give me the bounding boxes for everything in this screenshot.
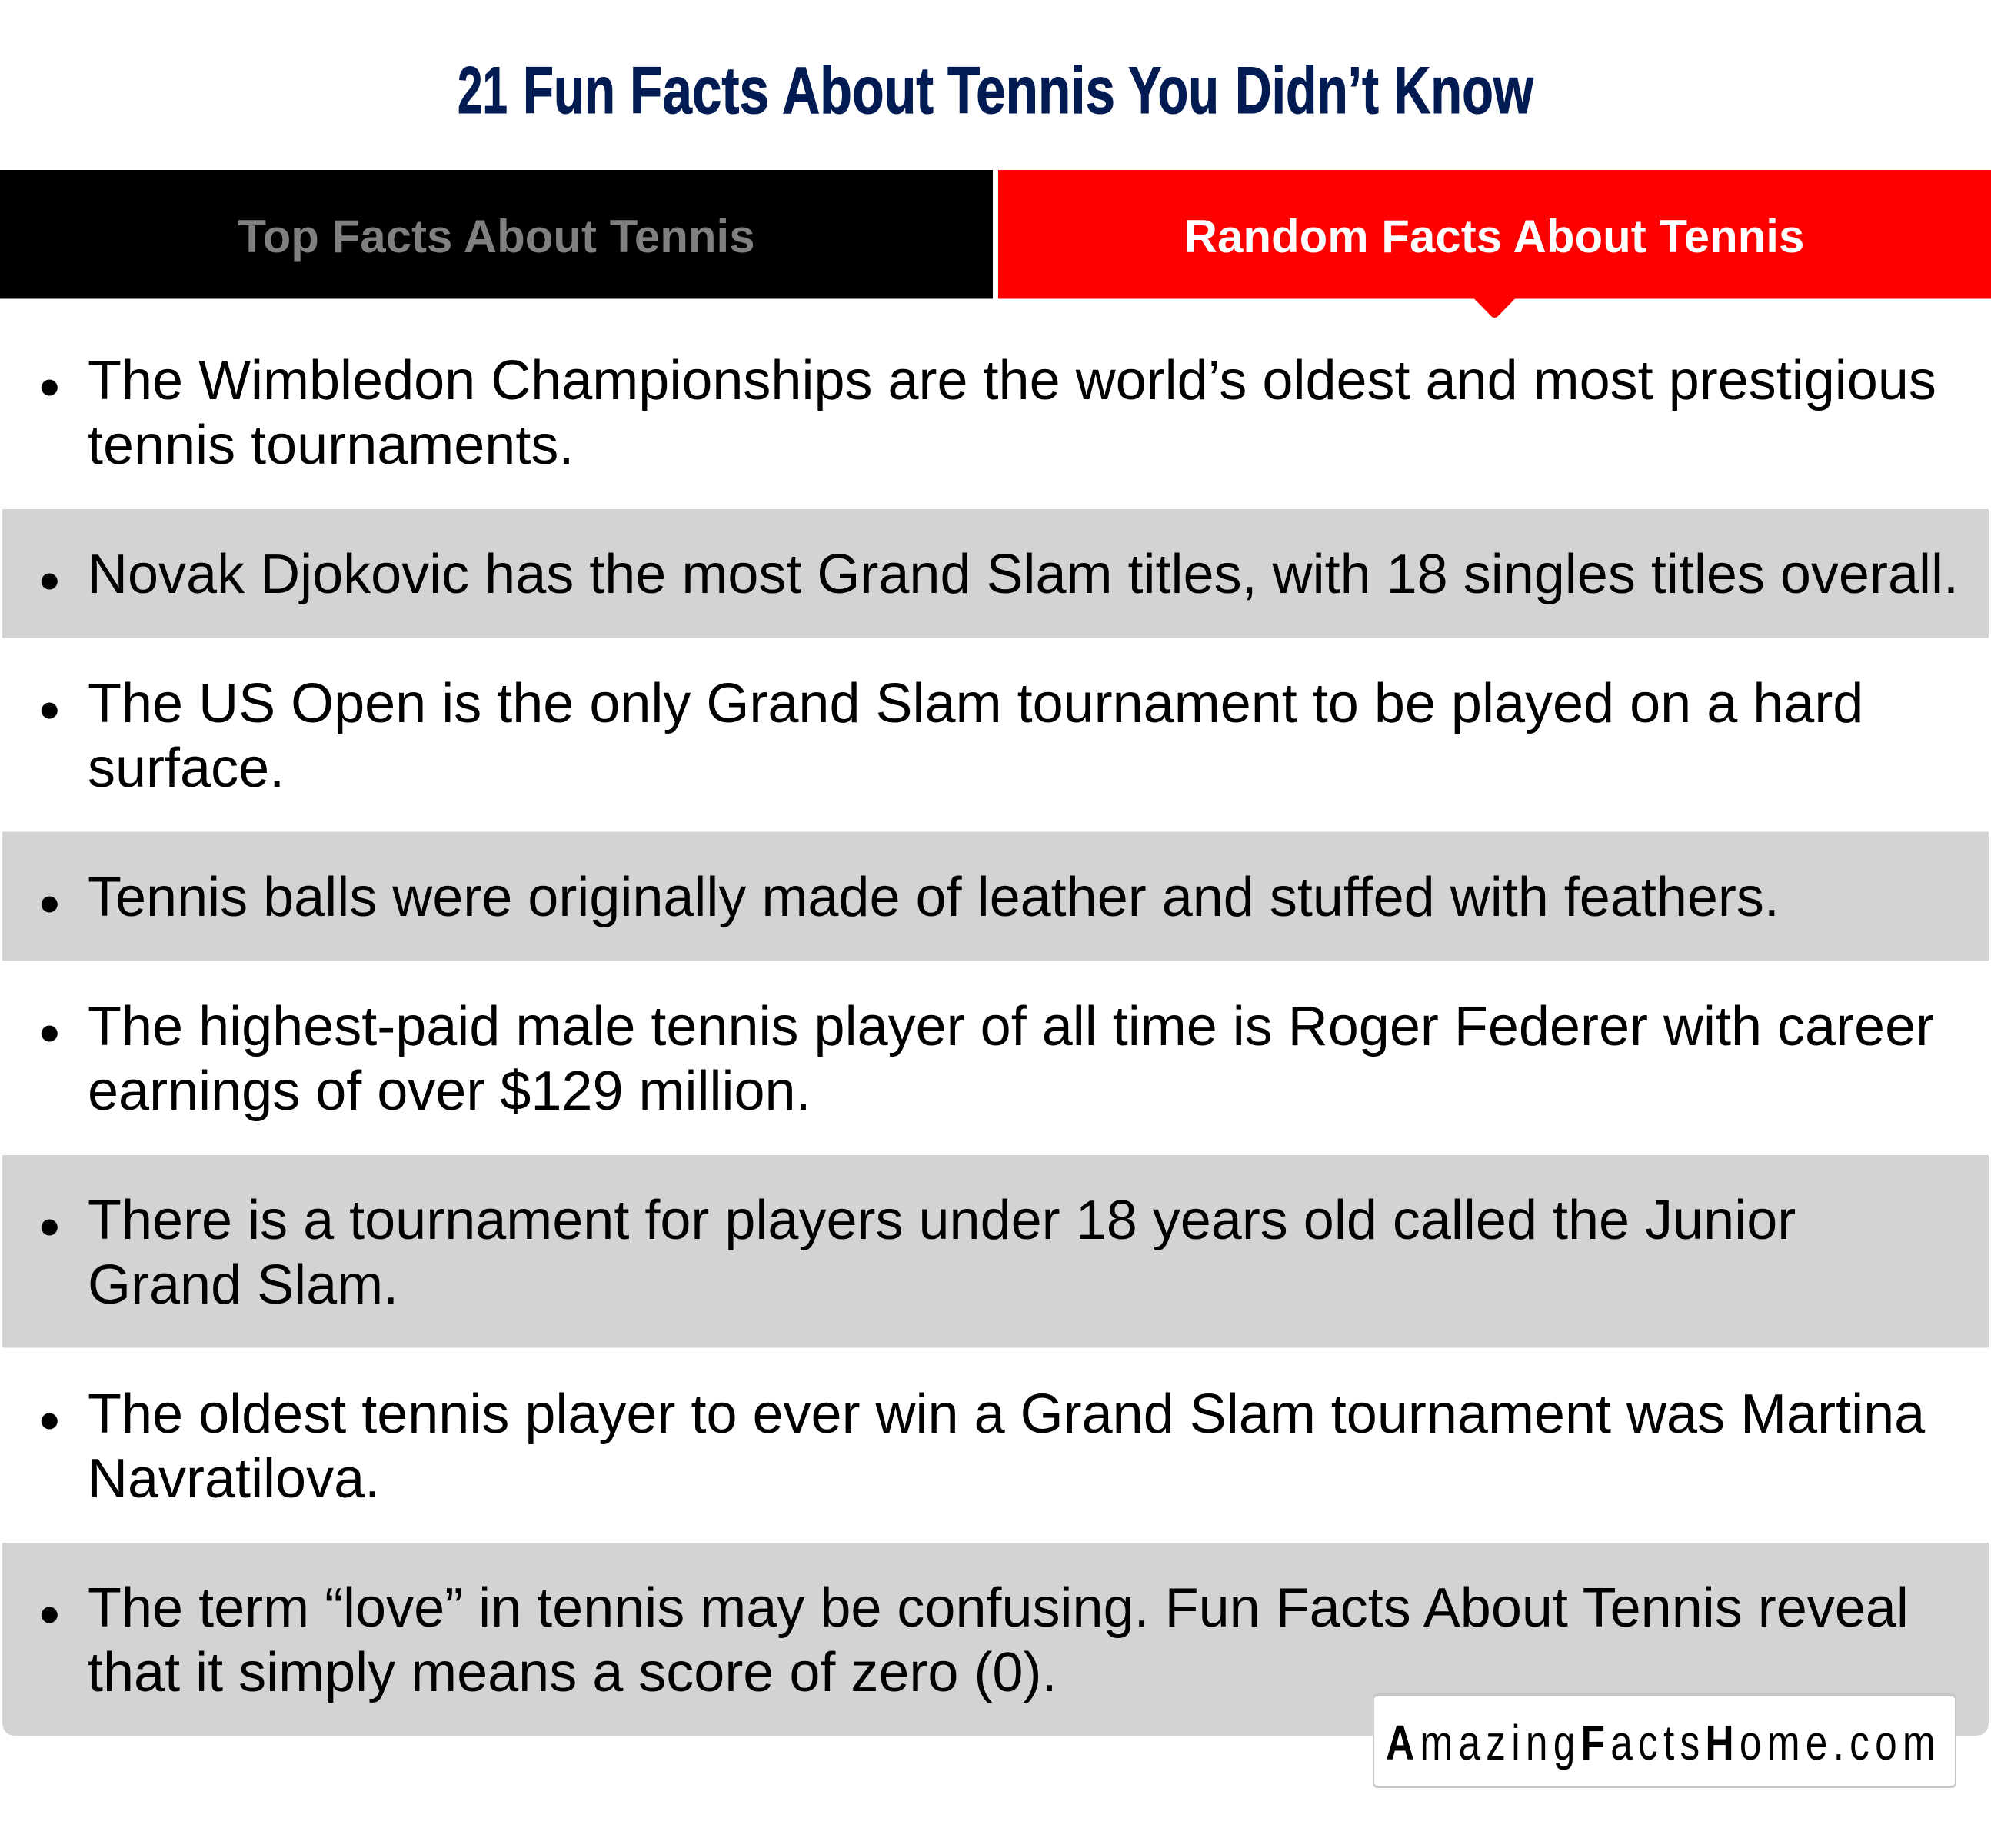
fact 6: Grand Slam. (88, 1254, 398, 1316)
fact 8 (2, 1543, 1989, 1736)
tab: top facts: Top Facts About Tennis (238, 211, 755, 262)
title: 21 (458, 54, 508, 128)
fact 5 (42, 996, 1934, 1122)
title: Know (1393, 54, 1534, 128)
fact 3: surface. (88, 738, 285, 799)
watermark: AmazingFactsHome.com (1386, 1715, 1941, 1770)
fact 5: earnings of over $129 million. (88, 1061, 811, 1122)
fact 3: The US Open is the only Grand Slam tournament to be played on a hard (88, 673, 1863, 734)
title: You (1128, 54, 1219, 128)
fact 8: that it simply means a score of zero (0). (88, 1642, 1057, 1703)
fact 7: The oldest tennis player to ever win a Grand Slam tournament was Martina (88, 1384, 1926, 1445)
watermark (1373, 1693, 1956, 1788)
tab: top facts (0, 170, 993, 298)
fact 4: Tennis balls were originally made of leather and stuffed with feathers. (88, 867, 1780, 928)
title: Didn’t (1235, 54, 1379, 128)
fact 7 (42, 1384, 1926, 1510)
title: About (782, 54, 934, 128)
fact 2: Novak Djokovic has the most Grand Slam titles, with 18 singles titles overall. (88, 544, 1959, 605)
fact 1: The Wimbledon Championships are the world’s oldest and most prestigious (88, 350, 1936, 411)
fact 2 (2, 509, 1989, 638)
title: Facts (630, 54, 769, 128)
tab: random facts (active) (998, 170, 1991, 318)
fact 3 (42, 673, 1863, 799)
title: Tennis (947, 54, 1115, 128)
fact 6 (2, 1155, 1989, 1347)
tab: random facts (active): Random Facts About Tennis (1184, 211, 1804, 262)
fact 7: Navratilova. (88, 1448, 380, 1510)
fact 4 (2, 832, 1989, 961)
fact 8: The term “love” in tennis may be confusing. Fun Facts About Tennis reveal (88, 1577, 1909, 1639)
fact 1 (42, 350, 1936, 476)
fact 5: The highest-paid male tennis player of all time is Roger Federer with career (88, 996, 1934, 1057)
fact 6: There is a tournament for players under 18 years old called the Junior (88, 1190, 1796, 1251)
fact 1: tennis tournaments. (88, 415, 574, 476)
title (458, 54, 1534, 128)
title: Fun (523, 54, 615, 128)
